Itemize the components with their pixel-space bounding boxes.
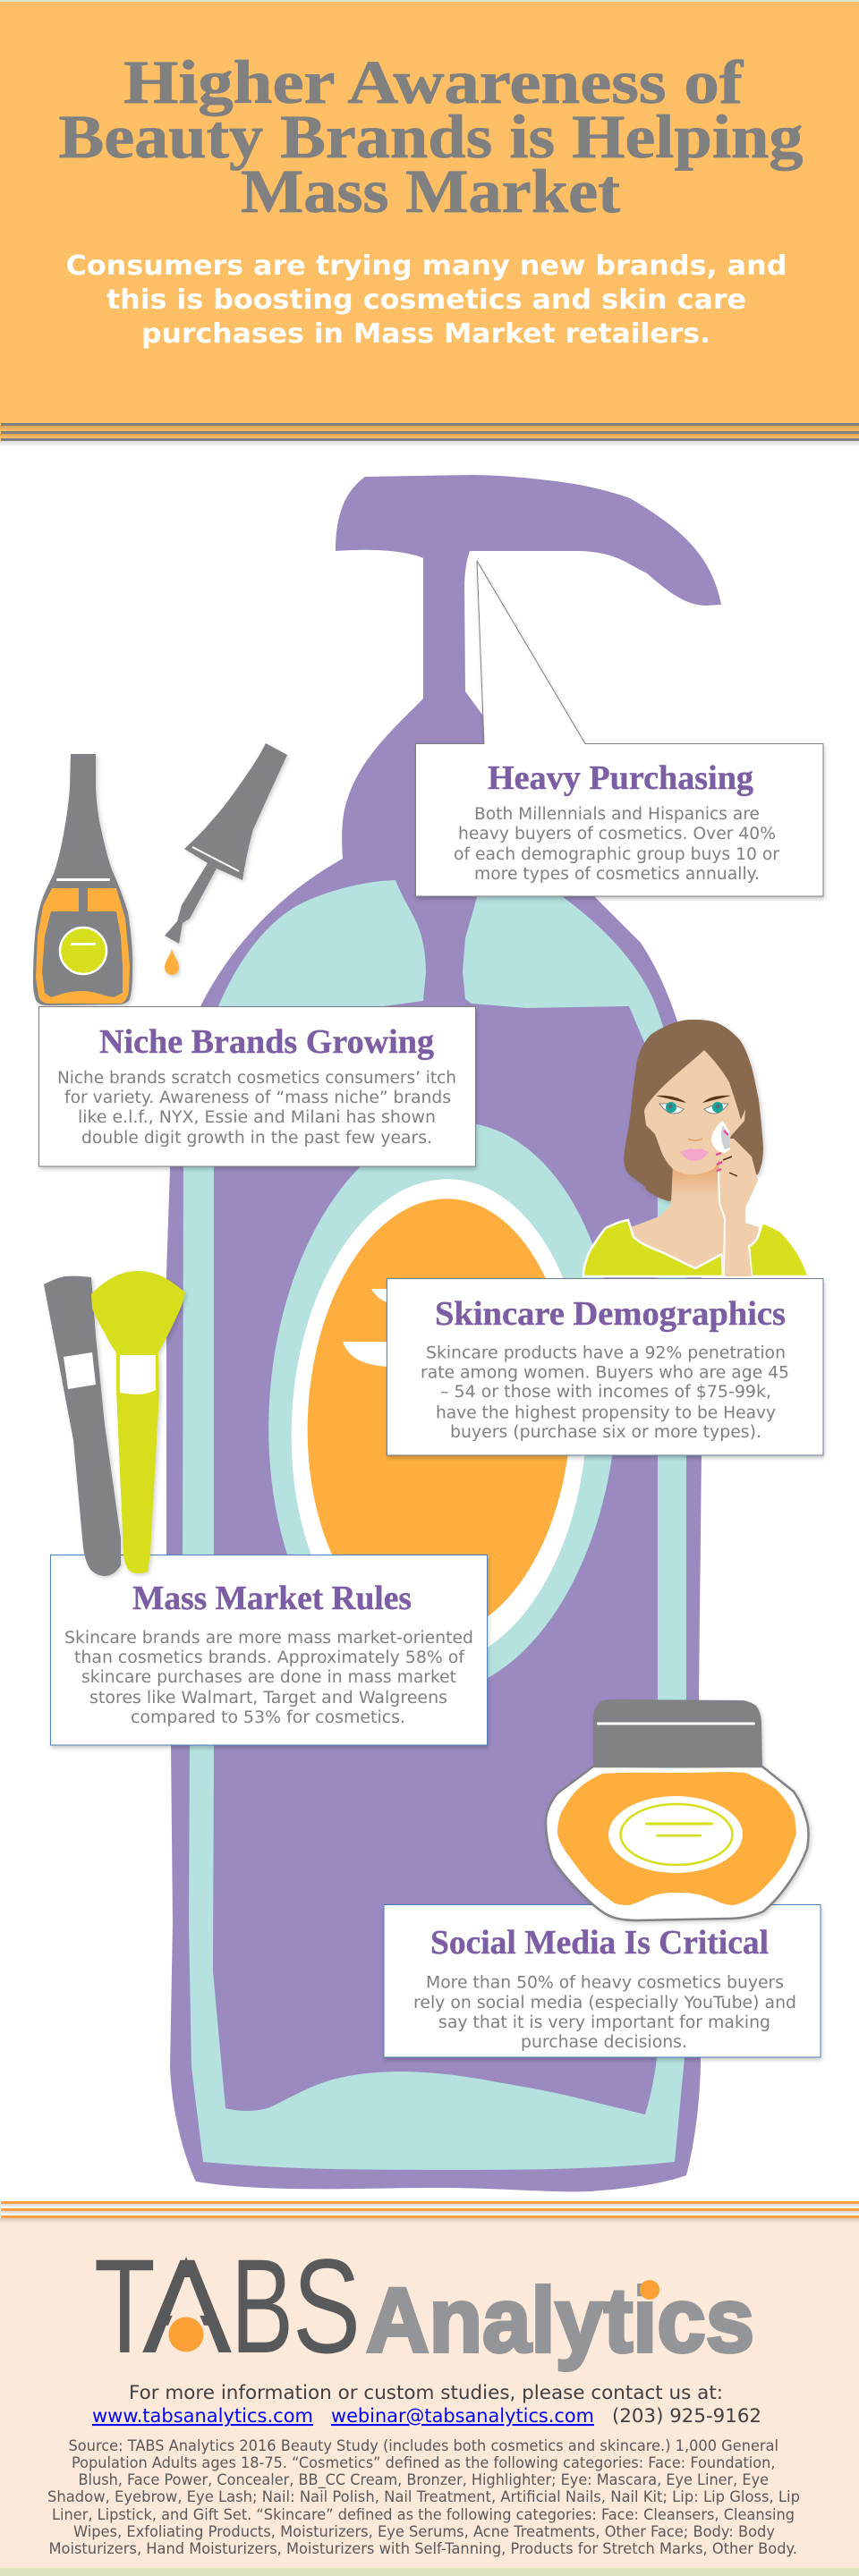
title: Mass Market: [241, 157, 620, 225]
bottle stem and inner body: [213, 872, 658, 2114]
nose: [688, 1139, 702, 1140]
footer band: [0, 2201, 859, 2576]
body text: Niche brands scratch cosmetics consumers’ itch: [57, 1069, 456, 1088]
panel: skincare demographics: [387, 1279, 823, 1455]
source note: Moisturizers, Hand Moisturizers, Moisturizers with Self-Tanning, Products for Stretch Marks, Other Body.: [48, 2540, 797, 2557]
centre orange oval: [296, 1192, 583, 1643]
body text: More than 50% of heavy cosmetics buyers: [426, 1973, 784, 1993]
body text: than cosmetics brands. Approximately 58% of: [74, 1648, 464, 1667]
card: [387, 1279, 823, 1455]
logo A counter and dot: [157, 2257, 216, 2353]
icon: nail polish bottle: [33, 754, 132, 1005]
subtitle: purchases in Mass Market retailers.: [141, 318, 710, 350]
source note: Shadow, Eyebrow, Eye Lash; Nail: Nail Polish, Nail Treatment, Artificial Nails, Nail Kit; Lip: Lip Gloss, Lip: [47, 2488, 800, 2505]
body text: compared to 53% for cosmetics.: [131, 1708, 405, 1727]
fingernails: [716, 1131, 728, 1171]
body text: double digit growth in the past few years.: [81, 1129, 432, 1148]
body text: – 54 or those with incomes of $75-99k,: [440, 1383, 771, 1402]
body text: Skincare products have a 92% penetration: [426, 1343, 786, 1363]
body text: of each demographic group buys 10 or: [454, 845, 779, 864]
neck and chest: [631, 1163, 759, 1276]
body text: rate among women. Buyers who are age 45: [421, 1363, 789, 1383]
jar cap: [593, 1699, 762, 1767]
polish colour: [36, 888, 130, 1004]
eyebrows: [656, 1096, 731, 1103]
contact text: www.tabsanalytics.com: [92, 2405, 313, 2427]
icon: polish drop: [165, 948, 179, 975]
heading: Mass Market Rules: [132, 1580, 412, 1617]
bottle highlight: [56, 878, 110, 881]
body text: rely on social media (especially YouTube) and: [413, 1994, 796, 2012]
body text: Skincare brands are more mass market-oriented: [64, 1629, 473, 1648]
title: [59, 48, 804, 225]
bottle outer silhouette: [166, 475, 721, 2191]
logo: TABS Analytics: A: [142, 2231, 232, 2381]
body text: [57, 1069, 456, 1148]
subtitle: [66, 250, 787, 350]
body text: for variety. Awareness of “mass niche” brands: [64, 1089, 451, 1107]
bottle label: [42, 888, 123, 997]
contact text: For more information or custom studies, please contact us at:: [129, 2382, 723, 2403]
card: [50, 1555, 487, 1745]
icon: woman with cotton pad: [583, 1020, 808, 1276]
body text: stores like Walmart, Target and Walgreens: [89, 1689, 447, 1707]
bottle label circle: [60, 928, 106, 974]
source note: Source: TABS Analytics 2016 Beauty Study (includes both cosmetics and skincare.) 1,000 General: [68, 2437, 778, 2454]
subtitle: this is boosting cosmetics and skin care: [106, 284, 746, 316]
arm highlight: [719, 1172, 725, 1276]
logo: TABS Analytics: Analytics: [366, 2269, 754, 2371]
body text: [413, 1973, 796, 2052]
heading: Heavy Purchasing: [488, 759, 753, 797]
body text: say that it is very important for making: [438, 2013, 770, 2032]
body text: purchase decisions.: [521, 2033, 687, 2052]
body text: have the highest propensity to be Heavy: [436, 1404, 776, 1422]
jar label: [608, 1796, 743, 1873]
brush band: [120, 1355, 156, 1394]
panel: social media is critical: [384, 1905, 821, 2057]
top: [583, 1220, 808, 1276]
body text: heavy buyers of cosmetics. Over 40%: [458, 825, 776, 843]
source note: Liner, Lipstick, and Gift Set. “Skincare” defined as the following categories: Face: Cleansers, Cleansing: [52, 2506, 795, 2523]
body text: Both Millennials and Hispanics are: [474, 805, 760, 824]
panel: niche brands growing: [39, 1007, 476, 1166]
icon: nail polish brush: [165, 743, 287, 944]
contact text: webinar@tabsanalytics.com: [331, 2405, 594, 2427]
icon: grey makeup brush: [44, 1276, 121, 1576]
pump bottle illustration: [166, 475, 721, 2191]
body text: [454, 805, 779, 884]
logo: TABS Analytics: S: [293, 2232, 361, 2382]
header band: [0, 0, 859, 447]
contact text: [92, 2382, 761, 2427]
brush band: [64, 1352, 96, 1389]
panel: heavy purchasing: [415, 561, 823, 896]
bottle teal liquid: [183, 880, 686, 2170]
body text: more types of cosmetics annually.: [474, 865, 760, 884]
cotton pad: [711, 1121, 730, 1153]
source note: [47, 2437, 800, 2557]
hand and arm: [719, 1139, 758, 1276]
eyes: [659, 1102, 728, 1114]
centre white oval: [279, 1172, 600, 1673]
body text: [421, 1343, 789, 1442]
centre teal oval: [250, 1110, 636, 1706]
source note: Wipes, Exfoliating Products, Moisturizers, Eye Serums, Acne Treatments, Other Face; Body: Body: [73, 2523, 775, 2540]
icon: lotion jar: [546, 1699, 809, 1920]
card: [39, 1007, 476, 1166]
finger lines: [723, 1157, 737, 1176]
panel: mass market rules: [50, 1555, 487, 1745]
oval highlights: [343, 1289, 394, 1367]
body text: skincare purchases are done in mass market: [81, 1668, 456, 1687]
body text: like e.l.f., NYX, Essie and Milani has shown: [78, 1108, 436, 1127]
heading: Niche Brands Growing: [99, 1023, 434, 1061]
heading: Social Media Is Critical: [430, 1924, 769, 1962]
logo: TABS Analytics: T: [94, 2232, 156, 2382]
contact text: (203) 925-9162: [612, 2405, 761, 2427]
card: [384, 1905, 821, 2057]
cap highlight: [597, 1723, 755, 1724]
icon: lime makeup brush: [91, 1271, 185, 1573]
source note: Population Adults ages 18-75. “Cosmetics” defined as the following categories: Face: Foundation,: [72, 2454, 775, 2471]
subtitle: Consumers are trying many new brands, and: [66, 250, 787, 282]
body text: [64, 1629, 473, 1727]
source note: Blush, Face Power, Concealer, BB_CC Cream, Bronzer, Highlighter; Eye: Mascara, Eye Liner, Eye: [79, 2471, 769, 2489]
face: [644, 1050, 745, 1174]
title: Beauty Brands is Helping: [59, 103, 804, 171]
hair: [624, 1020, 763, 1201]
title: Higher Awareness of: [123, 48, 744, 116]
callout box with pointer: [415, 561, 823, 896]
jar colour: [557, 1772, 796, 1905]
heading: Skincare Demographics: [435, 1295, 786, 1333]
logo: TABS Analytics: [94, 2231, 754, 2382]
body text: buyers (purchase six or more types).: [450, 1423, 761, 1442]
lips: [680, 1148, 709, 1161]
logo: TABS Analytics: B: [231, 2233, 293, 2381]
jar body: [546, 1767, 809, 1920]
